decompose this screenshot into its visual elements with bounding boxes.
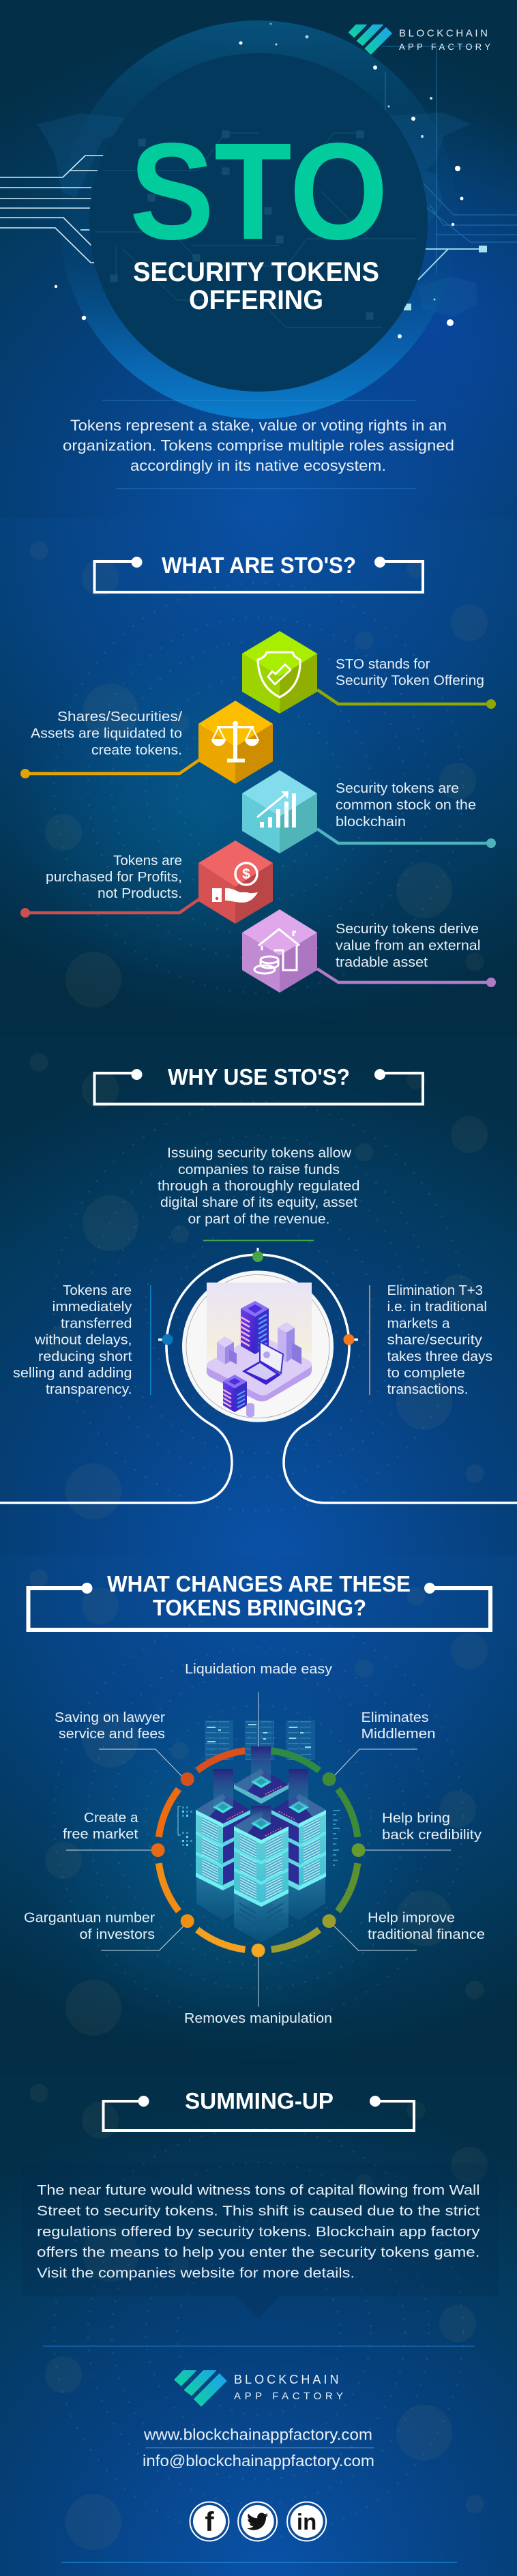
vertical rule: blue (150, 1285, 151, 1395)
label: common stock: common stock on the (336, 797, 476, 813)
label: eliminates middlemen: Middlemen (361, 1726, 435, 1742)
server reflections (196, 1873, 325, 1942)
text: elimination T+3: i.e. in traditional (387, 1299, 487, 1315)
label: shares securities (31, 709, 182, 758)
subtitle: OFFERING (189, 285, 323, 315)
summary text: offers the means to help you enter the security tokens game. (37, 2244, 480, 2260)
title: STO: STO (130, 114, 388, 268)
tower: front (234, 1806, 289, 1907)
text: tokens immediately transferred: reducing short (38, 1349, 132, 1364)
background: hero section (0, 0, 517, 546)
label: credibility (382, 1811, 482, 1843)
text: issuing tokens: companies to raise funds (178, 1162, 340, 1177)
hexagon: house and coins (242, 909, 317, 993)
icon: hand with coin: $ (242, 866, 250, 882)
label: credibility: Help bring (382, 1811, 450, 1826)
panel: why use (0, 1145, 517, 1503)
leader line: purple (317, 969, 496, 987)
panel: token changes diagram (24, 1661, 485, 2026)
label: STO stands for: Security Token Offering (336, 673, 484, 688)
text: issuing tokens: through a thoroughly regulated (158, 1178, 360, 1194)
heading: summing up: SUMMING-UP (185, 2088, 334, 2113)
contact: website: www.blockchainappfactory.com (143, 2426, 372, 2444)
icon: balance scales (211, 721, 259, 763)
small cylinder (246, 1403, 254, 1417)
label: gargantuan (24, 1910, 155, 1942)
icon: facebook (190, 2502, 229, 2541)
label: purchased for profits (46, 853, 182, 901)
label: external asset: Security tokens derive (336, 921, 479, 937)
heading: what changes (29, 1571, 490, 1630)
hexagon: shield (242, 631, 317, 714)
label: shares securities: Shares/Securities/ (57, 709, 182, 724)
leader line: red (20, 899, 199, 918)
leader line: green (317, 690, 496, 709)
intro text (63, 417, 454, 474)
summary text: Street to security tokens. This shift is caused due to the strict (37, 2204, 480, 2219)
left building (217, 1336, 237, 1364)
label: removes manipulation: Removes manipulation (184, 2010, 332, 2026)
subtitle: SECURITY TOKENS (133, 257, 379, 287)
text: elimination T+3: Elimination T+3 (387, 1283, 483, 1298)
glowing star dots (55, 23, 464, 338)
label: external asset (336, 921, 480, 970)
heading: why use STOs: WHY USE STO'S? (168, 1064, 350, 1089)
vertical rule: orange (369, 1285, 370, 1395)
icon: linkedin (287, 2502, 326, 2541)
world map silhouette (38, 113, 477, 317)
label: purchased for profits: not Products. (98, 886, 182, 901)
intro text: Tokens represent a stake, value or voting rights in an (70, 417, 447, 434)
label: traditional finance: traditional finance (368, 1927, 485, 1942)
right circuit line and node (404, 246, 487, 310)
icon: facebook: f (205, 2507, 214, 2537)
node: blue (158, 1334, 173, 1345)
background: what changes (0, 1555, 517, 2074)
logo: top right: APP FACTORY (399, 42, 490, 52)
logo: footer (175, 2371, 343, 2406)
label: purchased for profits: Tokens are (113, 853, 182, 868)
label: common stock: blockchain (336, 814, 406, 830)
icon: linkedin: in (297, 2509, 316, 2534)
faint circuit traces in circle (95, 131, 416, 327)
icon: growth chart (257, 791, 296, 828)
summary text (37, 2182, 480, 2281)
hexagon: scales (198, 701, 273, 784)
tower: right (271, 1769, 326, 1890)
laptop (242, 1342, 283, 1385)
label: free market: free market (63, 1826, 138, 1842)
side data readouts (178, 1806, 340, 1865)
panel: hexagon steps (20, 631, 496, 993)
logo: footer: APP FACTORY (234, 2390, 343, 2402)
ring nodes (151, 1772, 366, 1957)
dark central circle (89, 53, 428, 392)
summary text: The near future would witness tons of capital flowing from Wall (37, 2182, 480, 2198)
text: elimination T+3: takes three days (387, 1349, 492, 1364)
footer (43, 2345, 475, 2563)
summary text: Visit the companies website for more details. (37, 2265, 355, 2281)
label: eliminates middlemen (361, 1710, 435, 1742)
logo: top right: BLOCKCHAIN (399, 27, 488, 40)
label: saving on lawyer: Saving on lawyer (55, 1710, 165, 1725)
label: liquidation: Liquidation made easy (185, 1661, 333, 1677)
text: issuing tokens: or part of the revenue. (188, 1212, 330, 1227)
label: gargantuan: Gargantuan number (24, 1910, 155, 1925)
ring segments (117, 1710, 399, 1991)
glow ring (59, 20, 458, 419)
tower: left (196, 1769, 250, 1890)
platform (207, 1364, 312, 1401)
text: tokens immediately transferred: without delays, (34, 1332, 132, 1348)
label: free market (63, 1810, 138, 1842)
text: tokens immediately transferred: transferred (61, 1315, 132, 1332)
label: shares securities: create tokens. (91, 742, 182, 758)
text: tokens immediately transferred: transparency. (46, 1381, 132, 1397)
heading: what changes: TOKENS BRINGING? (153, 1595, 366, 1620)
contact: email: info@blockchainappfactory.com (143, 2452, 374, 2470)
small server (223, 1375, 247, 1412)
background: what are STOs (0, 518, 517, 1037)
heading: summing up (104, 2088, 414, 2131)
right building (278, 1322, 301, 1364)
logo: top right (349, 25, 490, 54)
label: eliminates middlemen: Eliminates (361, 1710, 428, 1725)
label: external asset: tradable asset (336, 954, 428, 970)
text: tokens immediately transferred: Tokens are (63, 1283, 132, 1298)
faint right circuit lines (102, 46, 517, 488)
hexagon: chart (242, 770, 317, 853)
label: traditional finance (368, 1910, 485, 1942)
logo: footer: BLOCKCHAIN (234, 2373, 338, 2386)
line frame around circle (0, 1255, 517, 1503)
icon: twitter (238, 2502, 277, 2541)
leader line: cyan (317, 829, 496, 848)
label: purchased for profits: purchased for Profits, (46, 869, 182, 885)
label: external asset: value from an external (336, 937, 480, 954)
intro text: organization. Tokens comprise multiple roles assigned (63, 437, 454, 454)
text: elimination T+3 (387, 1283, 492, 1397)
subtitle (133, 257, 379, 315)
label: gargantuan: of investors (79, 1927, 155, 1942)
heading: what are STOs: WHAT ARE STO'S? (162, 553, 356, 578)
label: common stock: Security tokens are (336, 780, 459, 796)
text: issuing tokens: digital share of its equity, asset (160, 1195, 357, 1210)
node: orange (344, 1334, 358, 1345)
text: issuing tokens: Issuing security tokens allow (167, 1145, 351, 1161)
connector lines (66, 1692, 451, 2007)
heading: why use STOs (94, 1064, 423, 1104)
label: traditional finance: Help improve (368, 1910, 455, 1925)
label: saving on lawyer: service and fees (59, 1726, 165, 1742)
label: STO stands for: STO stands for (336, 656, 430, 672)
data panels (205, 1721, 315, 1760)
heading: what are STOs (94, 553, 423, 592)
text: elimination T+3: to complete (387, 1365, 465, 1381)
text: elimination T+3: share/security (387, 1332, 483, 1348)
node: green (252, 1248, 263, 1262)
left circuit lines (0, 156, 104, 263)
intro text: accordingly in its native ecosystem. (130, 457, 386, 474)
label: STO stands for (336, 656, 484, 688)
text: tokens immediately transferred: immediately (52, 1299, 132, 1315)
background: summing up and footer (0, 2074, 517, 2576)
label: free market: Create a (84, 1810, 138, 1826)
text: issuing tokens (158, 1145, 360, 1241)
summary text: regulations offered by security tokens. Blockchain app factory (37, 2224, 480, 2240)
text: tokens immediately transferred (13, 1283, 132, 1397)
label: credibility: back credibility (382, 1827, 482, 1843)
label: shares securities: Assets are liquidated to (31, 726, 182, 741)
background: why use STOs (0, 1037, 517, 1555)
text: elimination T+3: transactions. (387, 1381, 468, 1397)
text: tokens immediately transferred: selling and adding (13, 1365, 132, 1381)
icon: house and coins (254, 929, 299, 974)
text: elimination T+3: markets a (387, 1315, 450, 1332)
tower: back top (234, 1746, 289, 1804)
leader line: orange (20, 760, 199, 778)
server towers (196, 1746, 326, 1907)
white circle illustration (182, 1270, 334, 1422)
heading: what changes: WHAT CHANGES ARE THESE (107, 1571, 411, 1596)
icon: shield check (258, 652, 300, 697)
label: saving on lawyer (55, 1710, 165, 1742)
label: common stock (336, 780, 476, 830)
panel: summary callout (22, 2163, 499, 2319)
hexagon: money hand (198, 840, 273, 924)
tall server (240, 1301, 269, 1354)
panel: hero (0, 20, 517, 488)
